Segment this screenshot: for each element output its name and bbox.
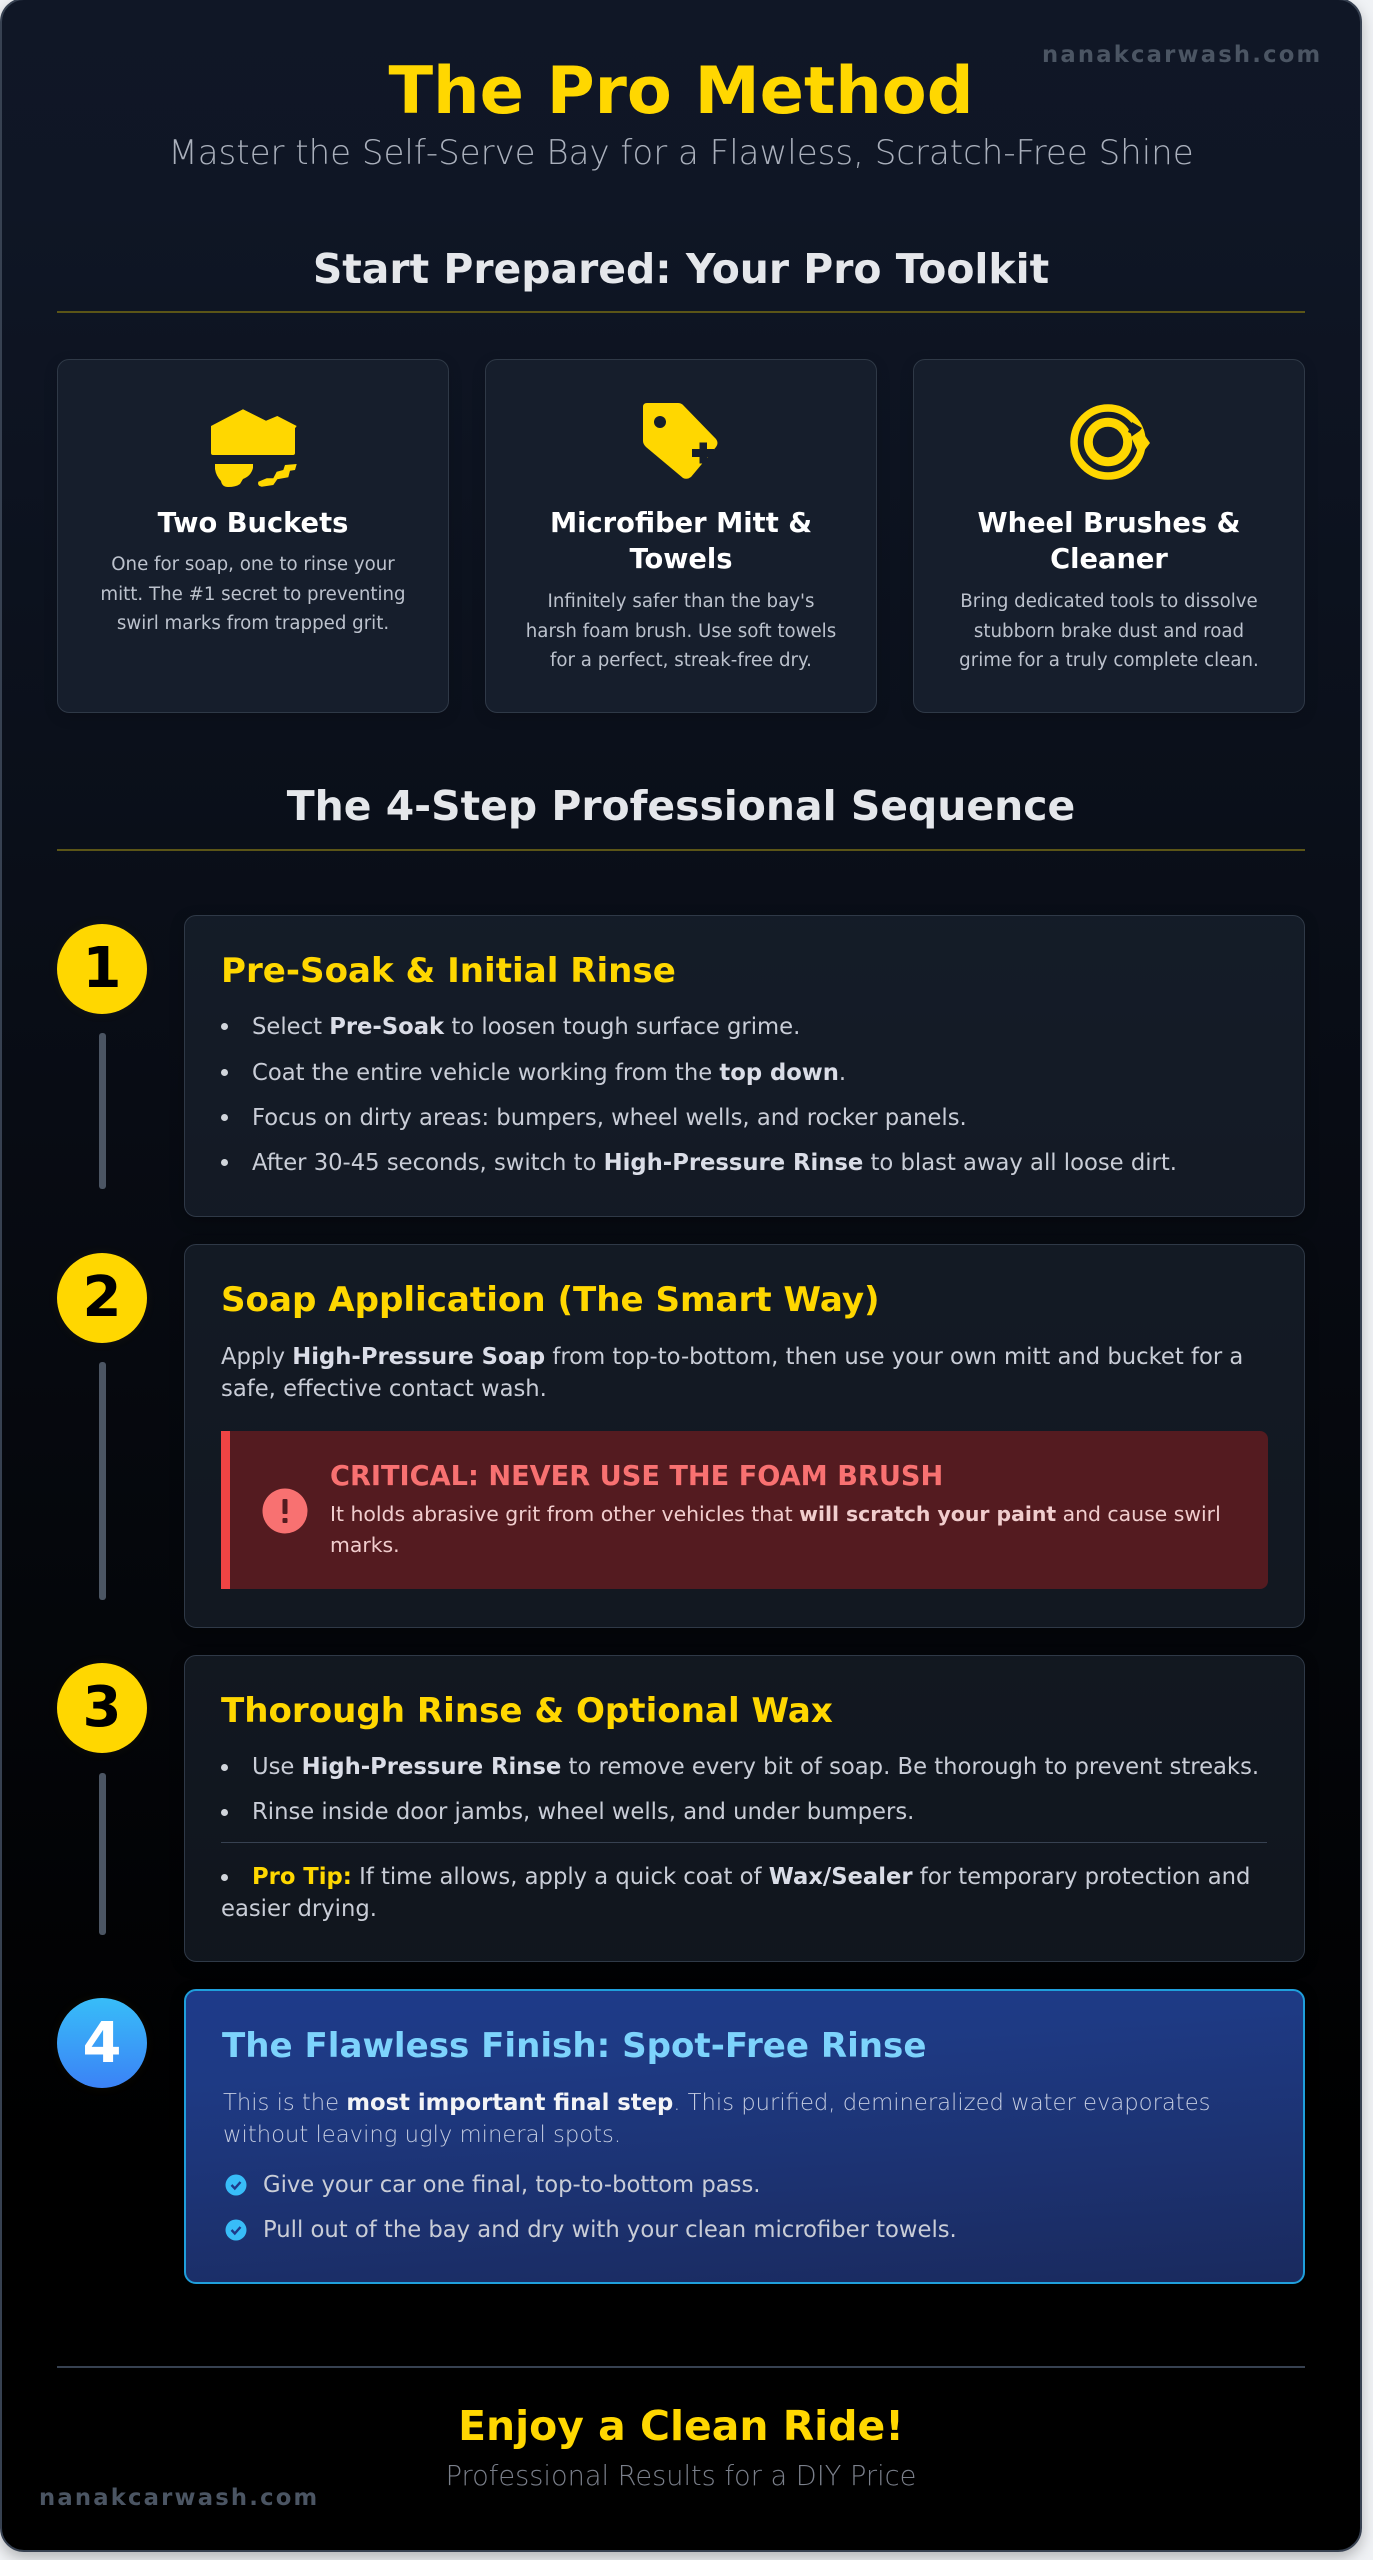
icon: wheel	[1070, 404, 1150, 480]
step 3 pro tip: easier drying.	[221, 1896, 377, 1922]
card text	[100, 554, 406, 634]
icon: warning	[262, 1488, 308, 1534]
callout: foam brush warning	[221, 1431, 1268, 1589]
card text: Bring dedicated tools to dissolve	[960, 591, 1258, 612]
watermark bottom: nanakcarwash.com	[39, 2485, 319, 2511]
step 3 number	[57, 1663, 147, 1753]
card title: Cleaner	[1050, 544, 1168, 575]
step 2 number	[57, 1253, 147, 1343]
panel: wheel brushes	[913, 359, 1305, 713]
callout text: It holds abrasive grit from other vehicles that will scratch your paint and cause swirl	[330, 1502, 1221, 1526]
step 1	[57, 915, 1305, 1217]
card text	[526, 591, 836, 671]
icon: check 2	[226, 2220, 246, 2240]
step 3	[57, 1655, 1305, 1962]
step 2 title: Soap Application (The Smart Way)	[221, 1280, 880, 1320]
step 1 number: 1	[83, 936, 121, 1001]
step 2 number: 2	[83, 1265, 121, 1330]
card text: Infinitely safer than the bay's	[548, 591, 814, 612]
panel: microfiber	[485, 359, 877, 713]
card text: mitt. The #1 secret to preventing	[100, 584, 406, 605]
callout text	[330, 1502, 1221, 1557]
step 3 pro tip	[221, 1864, 1250, 1922]
step 1 card	[184, 915, 1305, 1217]
step 1 number	[57, 924, 147, 1014]
step 2 text	[221, 1344, 1243, 1402]
footer title: Enjoy a Clean Ride!	[458, 2402, 904, 2450]
step 1 connector	[99, 1033, 106, 1189]
step 4 text	[223, 2090, 1210, 2148]
step 4 title: The Flawless Finish: Spot-Free Rinse	[222, 2026, 926, 2066]
card title: Wheel Brushes &	[978, 508, 1240, 539]
title: The Pro Method	[388, 53, 974, 129]
step 4 number	[57, 1998, 147, 2088]
step 4	[57, 1989, 1305, 2284]
step 1 bullet 4: After 30-45 seconds, switch to High-Pressure Rinse to blast away all loose dirt.	[252, 1150, 1177, 1176]
step 4 number: 4	[83, 2011, 121, 2076]
step 3 bullet 1: Use High-Pressure Rinse to remove every bit of soap. Be thorough to prevent streaks.	[252, 1754, 1259, 1780]
card text: swirl marks from trapped grit.	[117, 613, 389, 634]
callout title: CRITICAL: NEVER USE THE FOAM BRUSH	[330, 1461, 943, 1492]
card title	[550, 508, 812, 575]
step 3 card	[184, 1655, 1305, 1962]
step 1 bullet 3: Focus on dirty areas: bumpers, wheel wells, and rocker panels.	[252, 1105, 967, 1131]
card text: grime for a truly complete clean.	[959, 650, 1259, 671]
step 3 connector	[99, 1773, 106, 1935]
footer subtitle: Professional Results for a DIY Price	[446, 2461, 916, 2492]
icon: tag	[643, 403, 718, 479]
step 3 number: 3	[83, 1675, 121, 1740]
card text	[959, 591, 1259, 671]
check item 1: Give your car one final, top-to-bottom pass.	[263, 2172, 761, 2198]
card text: for a perfect, streak-free dry.	[550, 650, 812, 671]
card title	[978, 508, 1240, 575]
icon: check 1	[226, 2174, 246, 2196]
card title: Two Buckets	[158, 508, 348, 539]
card text: harsh foam brush. Use soft towels	[526, 621, 836, 642]
step 4 card	[184, 1989, 1305, 2284]
step 2	[57, 1244, 1305, 1628]
subtitle: Master the Self-Serve Bay for a Flawless, Scratch-Free Shine	[168, 133, 1194, 173]
step 2 text: safe, effective contact wash.	[221, 1376, 547, 1402]
panel: two buckets	[57, 359, 449, 713]
step 2 text: Apply High-Pressure Soap from top-to-bottom, then use your own mitt and bucket for a	[221, 1344, 1243, 1370]
heading: sequence: The 4-Step Professional Sequence	[287, 782, 1075, 830]
callout text: marks.	[330, 1533, 400, 1557]
card text: stubborn brake dust and road	[974, 621, 1244, 642]
step 3 pro tip: Pro Tip: If time allows, apply a quick coat of Wax/Sealer for temporary protection and	[252, 1864, 1250, 1890]
check item 2: Pull out of the bay and dry with your clean microfiber towels.	[263, 2217, 957, 2243]
watermark top: nanakcarwash.com	[1042, 42, 1322, 68]
step 1 bullet 1: Select Pre-Soak to loosen tough surface grime.	[252, 1014, 800, 1040]
card title: Microfiber Mitt &	[550, 508, 812, 539]
icon: buckets	[211, 409, 297, 487]
card title: Towels	[629, 544, 733, 575]
step 3 bullet 2: Rinse inside door jambs, wheel wells, and under bumpers.	[252, 1799, 914, 1825]
step 2 card	[184, 1244, 1305, 1628]
step 1 title: Pre-Soak & Initial Rinse	[221, 951, 676, 991]
card text: One for soap, one to rinse your	[111, 554, 395, 575]
step 1 bullet 2: Coat the entire vehicle working from the top down.	[252, 1060, 846, 1086]
step 3 title: Thorough Rinse & Optional Wax	[221, 1691, 833, 1731]
step 2 connector	[99, 1362, 106, 1600]
step 4 text: without leaving ugly mineral spots.	[223, 2122, 621, 2148]
heading: toolkit: Start Prepared: Your Pro Toolkit	[313, 245, 1049, 293]
step 4 text: This is the most important final step. This purified, demineralized water evaporates	[223, 2090, 1210, 2116]
